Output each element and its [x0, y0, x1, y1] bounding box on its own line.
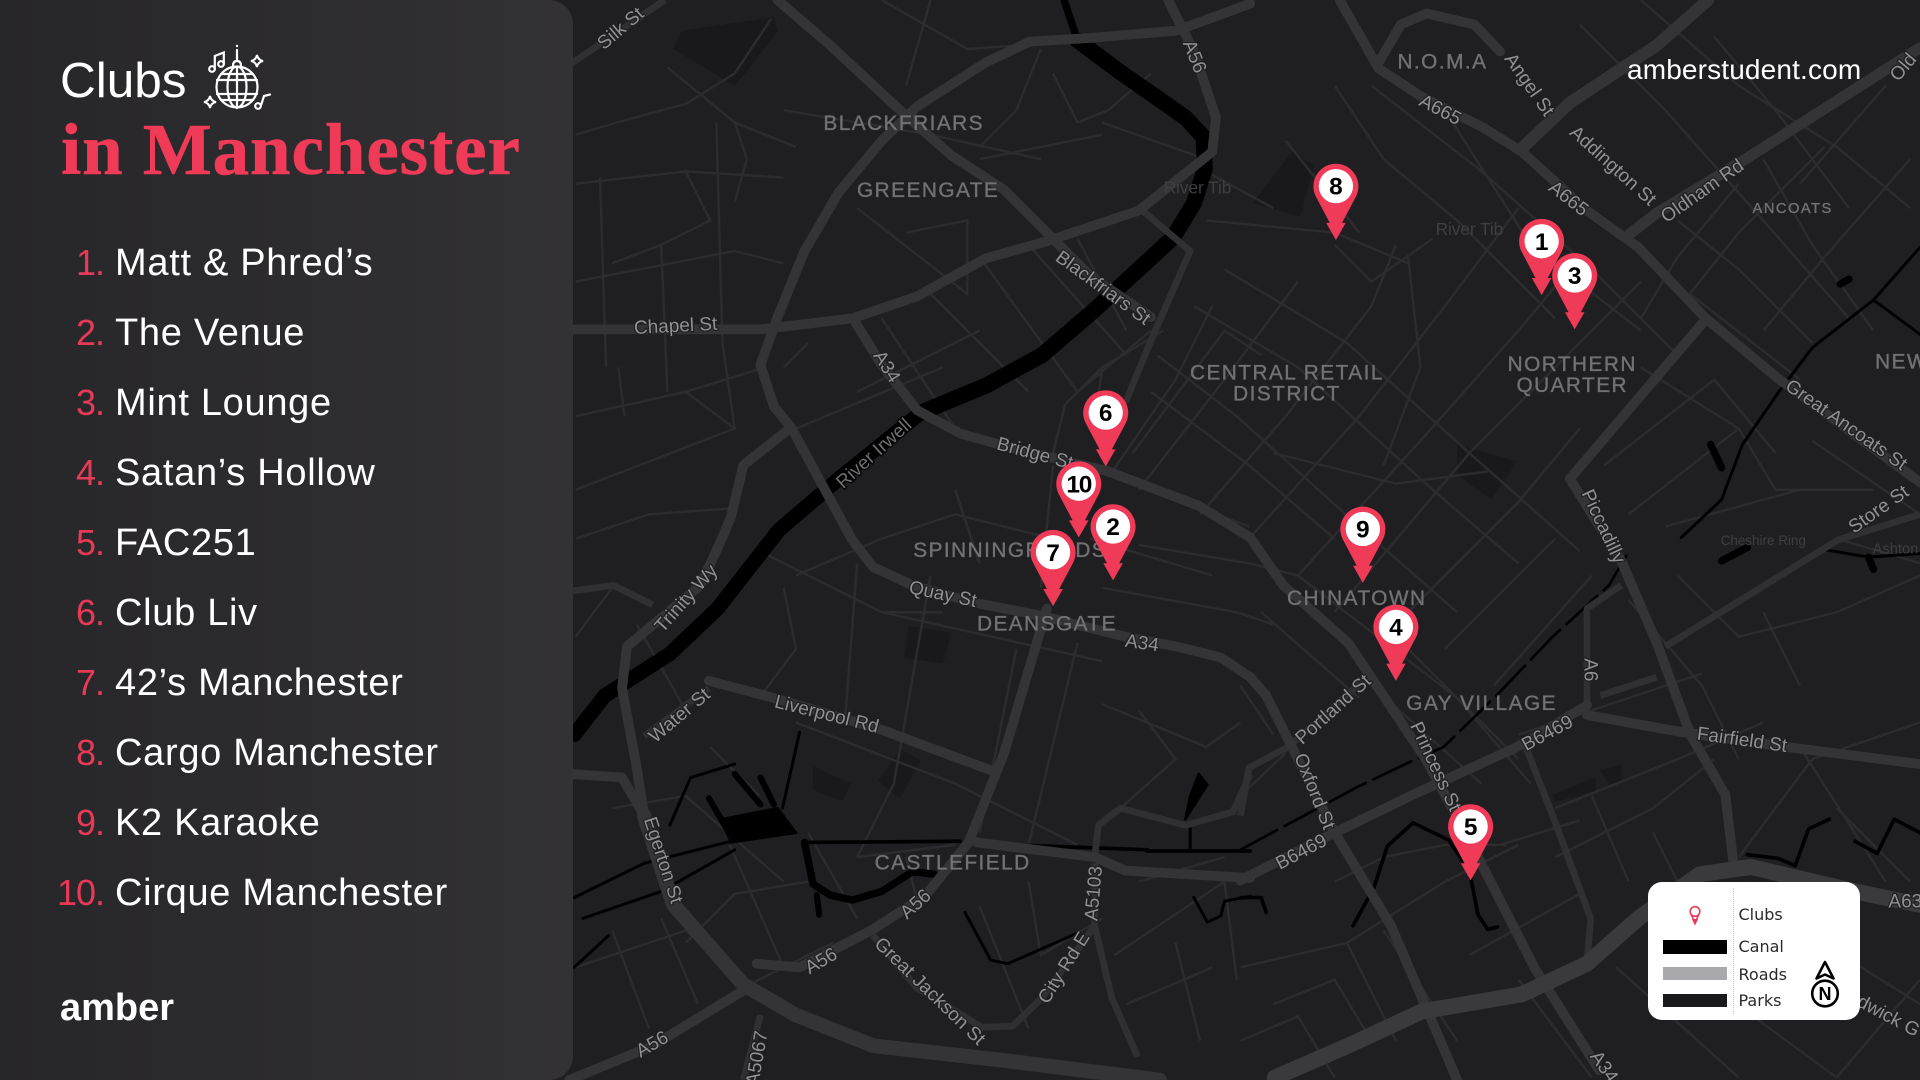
icon: disco ball [204, 44, 272, 110]
legend swatch: Roads [1662, 967, 1726, 980]
pin 8: 8 [1329, 174, 1343, 201]
item 10: 10. [57, 872, 104, 913]
canals and rivers [574, 0, 1920, 967]
area labels: DEANSGATE [977, 613, 1117, 636]
icon: north arrow [1810, 960, 1840, 1008]
road labels: Piccadilly [1577, 486, 1629, 567]
item 6: 6. [76, 592, 104, 633]
faint water labels: Ashton [1873, 541, 1918, 557]
legend swatch: Parks [1662, 994, 1726, 1007]
area labels: N.O.M.A [1397, 51, 1487, 74]
item 9: K2 Karaoke [115, 802, 321, 844]
item 1: 1. [76, 242, 104, 283]
item 6: Club Liv [115, 592, 258, 634]
road labels: Fairfield St [1696, 724, 1789, 757]
pin 7: 7 [1046, 540, 1060, 567]
road labels: A34 [868, 347, 904, 387]
legend icon: club pin [1689, 906, 1701, 926]
pin 6 [1083, 390, 1128, 467]
sparkles [204, 55, 263, 108]
legend label: Parks: Parks [1738, 991, 1781, 1010]
road labels: Chapel St [633, 314, 718, 339]
legend divider [1732, 888, 1734, 1014]
road labels: Portland St [1292, 670, 1376, 749]
pin 10 [1056, 461, 1101, 538]
item 8: Cargo Manchester [115, 732, 439, 774]
website address: amberstudent.com [1627, 54, 1861, 85]
area labels: ANCOATS [1753, 201, 1833, 217]
road labels: B6469 [1272, 830, 1331, 874]
pin 3: 3 [1568, 263, 1581, 290]
list of clubs [57, 242, 448, 914]
panel: club list [0, 0, 573, 1080]
area labels: DISTRICT [1233, 382, 1341, 405]
road labels: Great Ancoats St [1781, 376, 1911, 475]
item 8: 8. [76, 732, 104, 773]
road labels: Quay St [907, 577, 979, 612]
road labels: Addington St [1565, 122, 1661, 211]
area labels: SPINNINGFIELDS [913, 539, 1107, 562]
legend swatch: Canal [1662, 940, 1726, 954]
legend [1648, 882, 1860, 1020]
road labels: A56 [632, 1027, 672, 1062]
area labels: CENTRAL RETAIL [1190, 362, 1384, 385]
pin 2: 2 [1106, 514, 1120, 541]
pin 5 [1448, 804, 1493, 880]
item 9: 9. [76, 802, 104, 843]
faint water labels: Cheshire Ring [1721, 533, 1806, 548]
pin 8 [1313, 164, 1358, 240]
minor streets [576, 0, 1920, 1078]
parks [673, 17, 1621, 802]
road labels: Blackfriars St [1051, 247, 1155, 330]
road labels: Liverpool Rd [772, 692, 881, 738]
item 2: 2. [76, 312, 104, 353]
road labels: Great Jackson St [870, 933, 990, 1050]
item 4: 4. [76, 452, 104, 493]
area labels: BLACKFRIARS [823, 112, 984, 135]
road labels: A34 [1124, 631, 1160, 656]
area labels: QUARTER [1516, 374, 1628, 397]
road labels: A5103 [1081, 865, 1107, 922]
primary roads [569, 0, 1920, 1080]
road labels: A665 [1544, 177, 1592, 221]
road labels: A6 [1579, 658, 1600, 681]
road labels: Angel St [1500, 50, 1559, 121]
area labels: GREENGATE [857, 179, 999, 202]
area labels: GAY VILLAGE [1406, 692, 1557, 715]
area labels: CASTLEFIELD [875, 851, 1031, 874]
item 3: 3. [76, 382, 104, 423]
item 1: Matt & Phred’s [115, 242, 373, 284]
item 2: The Venue [115, 312, 305, 354]
road labels: River Irwell [832, 415, 916, 493]
item 5: 5. [76, 522, 104, 563]
logo: amber: amber [60, 987, 174, 1029]
road labels: Water St [645, 684, 715, 747]
pin 10: 10 [1066, 471, 1092, 498]
road labels: A56 [896, 885, 935, 924]
heading: in Manchester: in Manchester [61, 109, 521, 190]
item 3: Mint Lounge [115, 382, 332, 424]
heading: Clubs: Clubs [60, 53, 187, 108]
road labels: City Rd E [1034, 929, 1094, 1008]
legend label: Clubs: Clubs [1738, 905, 1783, 924]
icon: north arrow: N [1818, 984, 1832, 1004]
road labels: Bridge St [994, 434, 1076, 474]
pin 6: 6 [1099, 400, 1113, 427]
item 7: 42’s Manchester [115, 662, 404, 704]
area labels: CHINATOWN [1287, 587, 1427, 610]
pin 4: 4 [1389, 615, 1403, 642]
area labels: NORTHERN [1508, 353, 1637, 376]
road labels: B6469 [1518, 711, 1577, 756]
pin 7 [1031, 530, 1076, 606]
secondary roads [569, 0, 1920, 1080]
area labels [823, 51, 1920, 874]
item 10: Cirque Manchester [115, 872, 448, 914]
road labels: Store St [1845, 481, 1914, 538]
road labels: A56 [801, 944, 841, 979]
faint water labels [1164, 177, 1918, 557]
faint water labels: River Tib [1436, 219, 1503, 239]
pin 1 [1519, 219, 1564, 295]
road labels: A56 [1178, 37, 1210, 76]
road labels [594, 3, 1920, 1080]
road labels: A665 [1416, 91, 1465, 130]
road labels: Silk St [594, 3, 649, 54]
pin 1: 1 [1535, 229, 1548, 256]
pin 5: 5 [1464, 814, 1477, 841]
pin 9: 9 [1356, 517, 1370, 544]
pin 9 [1340, 507, 1385, 583]
road labels: Egerton St [639, 814, 687, 907]
road labels: Trinity Wy [651, 560, 723, 637]
pin 3 [1552, 253, 1597, 329]
item 7: 7. [76, 662, 104, 703]
road labels: Oxford St [1289, 750, 1339, 833]
legend label: Roads: Roads [1738, 964, 1787, 984]
item 5: FAC251 [115, 522, 257, 564]
road labels: Oldham Rd [1657, 155, 1748, 228]
faint water labels: River Tib [1164, 177, 1231, 197]
road labels: Princess St [1405, 719, 1465, 815]
pin 4 [1373, 605, 1418, 681]
legend label: Canal: Canal [1738, 937, 1784, 956]
item 4: Satan’s Hollow [115, 452, 375, 494]
pin 2 [1091, 504, 1136, 580]
